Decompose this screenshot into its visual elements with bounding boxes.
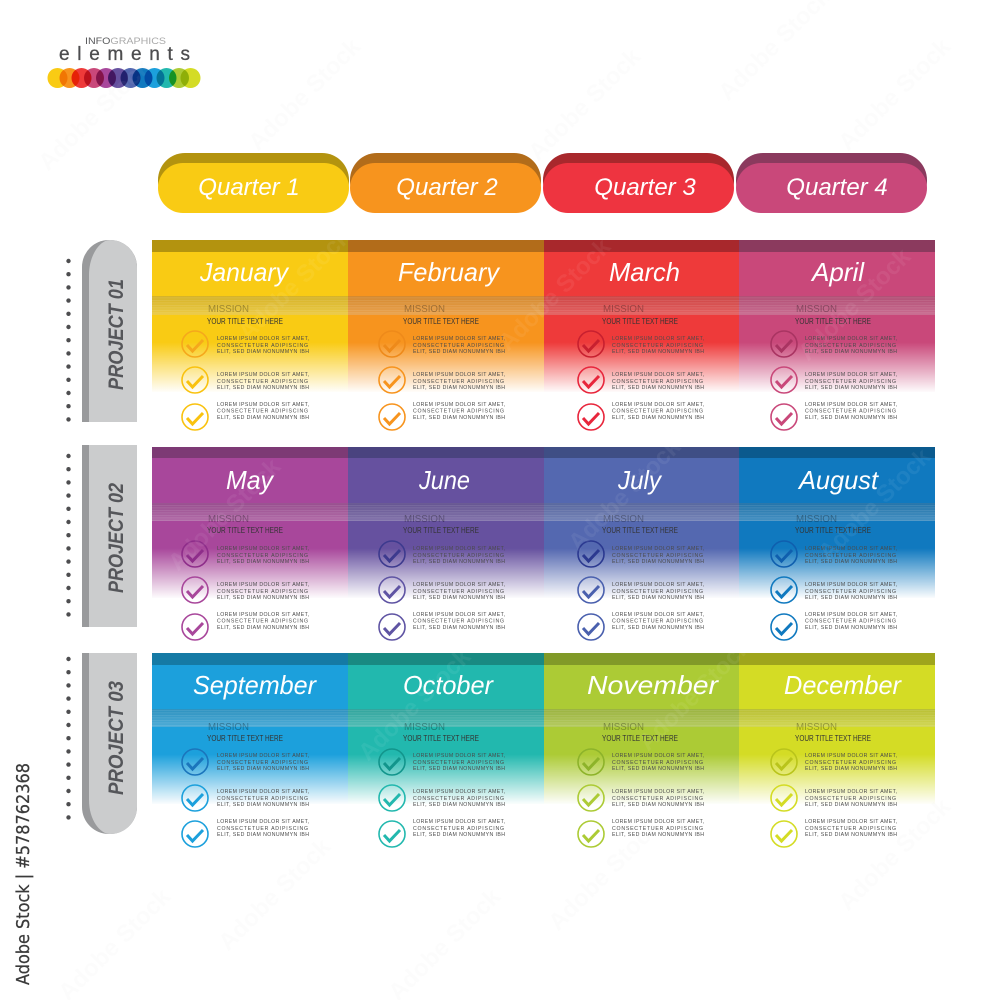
checklist: November <box>578 749 704 847</box>
checklist: December: LOREM IPSUM DOLOR SIT AMET, <box>805 753 897 759</box>
checklist: August: LOREM IPSUM DOLOR SIT AMET, <box>805 582 897 588</box>
mission and title labels: YOUR TITLE TEXT HERE <box>403 317 479 326</box>
checklist: September: LOREM IPSUM DOLOR SIT AMET, <box>217 819 309 825</box>
checklist: June <box>379 541 505 640</box>
checklist: April: ELIT, SED DIAM NONUMMYN IBH <box>805 415 897 421</box>
checklist: January: ELIT, SED DIAM NONUMMYN IBH <box>217 415 309 421</box>
checklist: August: ELIT, SED DIAM NONUMMYN IBH <box>805 625 897 631</box>
checklist: April: ELIT, SED DIAM NONUMMYN IBH <box>805 349 897 355</box>
watermarks on background: Adobe Stock <box>543 813 667 936</box>
checklist: May: CONSECTETUER ADIPISCING <box>217 589 308 595</box>
checklist: February: LOREM IPSUM DOLOR SIT AMET, <box>413 336 505 342</box>
checklist: November: ELIT, SED DIAM NONUMMYN IBH <box>612 766 704 772</box>
mission and title labels: MISSION <box>603 304 644 315</box>
watermarks on background: Adobe Stock <box>833 33 957 156</box>
checklist: February: CONSECTETUER ADIPISCING <box>413 343 504 349</box>
mission and title labels: YOUR TITLE TEXT HERE <box>795 317 871 326</box>
checklist: July: LOREM IPSUM DOLOR SIT AMET, <box>612 546 704 552</box>
checklist: February: LOREM IPSUM DOLOR SIT AMET, <box>413 372 505 378</box>
checklist: November: ELIT, SED DIAM NONUMMYN IBH <box>612 802 704 808</box>
mission and title labels: MISSION <box>404 514 445 525</box>
month labels: December <box>784 670 902 700</box>
checklist: June: LOREM IPSUM DOLOR SIT AMET, <box>413 546 505 552</box>
project 03 tab: PROJECT 03 <box>105 681 128 795</box>
checklist: March <box>578 331 704 430</box>
watermarks on background: Adobe Stock <box>833 793 957 916</box>
logo: infographics elements <box>48 36 200 88</box>
checklist: November: LOREM IPSUM DOLOR SIT AMET, <box>612 789 704 795</box>
checklist: February: CONSECTETUER ADIPISCING <box>413 408 504 414</box>
checklist: October: CONSECTETUER ADIPISCING <box>413 760 504 766</box>
logo overlapping circles <box>48 68 200 88</box>
checklist: July: LOREM IPSUM DOLOR SIT AMET, <box>612 582 704 588</box>
mission and title labels: YOUR TITLE TEXT HERE <box>602 734 678 743</box>
mission and title labels: YOUR TITLE TEXT HERE <box>602 526 678 535</box>
checklist: October: LOREM IPSUM DOLOR SIT AMET, <box>413 753 505 759</box>
checklist: July <box>578 541 704 640</box>
watermarks on panels: Adobe Stock <box>353 643 477 766</box>
watermarks on background: Adobe Stock <box>243 33 367 156</box>
row 1 colour panel <box>152 240 935 393</box>
month labels: January <box>199 257 290 287</box>
logo heading large: elements <box>59 44 190 65</box>
checklist: October: LOREM IPSUM DOLOR SIT AMET, <box>413 819 505 825</box>
checklist: September <box>182 749 309 847</box>
watermarks on panels: Adobe Stock <box>563 433 687 556</box>
checklist: January: CONSECTETUER ADIPISCING <box>217 379 308 385</box>
checklist: October: CONSECTETUER ADIPISCING <box>413 796 504 802</box>
mission and title labels: YOUR TITLE TEXT HERE <box>795 526 871 535</box>
mission and title labels: MISSION <box>208 304 249 315</box>
quarter 2 pill <box>350 153 541 213</box>
checklist: June: ELIT, SED DIAM NONUMMYN IBH <box>413 595 505 601</box>
mission and title labels: YOUR TITLE TEXT HERE <box>207 526 283 535</box>
checklist: October: ELIT, SED DIAM NONUMMYN IBH <box>413 766 505 772</box>
month labels: November <box>587 670 719 700</box>
mission and title labels: MISSION <box>404 722 445 733</box>
watermarks on background: Adobe Stock <box>33 53 157 176</box>
checklist: March: CONSECTETUER ADIPISCING <box>612 408 703 414</box>
checklist: August: LOREM IPSUM DOLOR SIT AMET, <box>805 546 897 552</box>
checklist: December: LOREM IPSUM DOLOR SIT AMET, <box>805 789 897 795</box>
month labels: May <box>226 465 275 495</box>
row 2 colour panel <box>152 447 935 599</box>
checklist: July: ELIT, SED DIAM NONUMMYN IBH <box>612 595 704 601</box>
checklist: September: LOREM IPSUM DOLOR SIT AMET, <box>217 789 309 795</box>
mission and title labels: MISSION <box>208 514 249 525</box>
month labels: April <box>810 257 865 287</box>
mission and title labels: YOUR TITLE TEXT HERE <box>403 734 479 743</box>
checklist: February: ELIT, SED DIAM NONUMMYN IBH <box>413 415 505 421</box>
mission and title labels: YOUR TITLE TEXT HERE <box>207 317 283 326</box>
checklist: January: LOREM IPSUM DOLOR SIT AMET, <box>217 402 309 408</box>
month labels: July <box>617 465 663 495</box>
checklist: August: ELIT, SED DIAM NONUMMYN IBH <box>805 595 897 601</box>
checklist: September: ELIT, SED DIAM NONUMMYN IBH <box>217 802 309 808</box>
checklist: January: ELIT, SED DIAM NONUMMYN IBH <box>217 349 309 355</box>
month labels: August <box>797 465 880 495</box>
checklist: October: LOREM IPSUM DOLOR SIT AMET, <box>413 789 505 795</box>
quarter 4 pill: Quarter 4 <box>786 174 888 201</box>
checklist: October <box>379 749 505 847</box>
checklist: October: ELIT, SED DIAM NONUMMYN IBH <box>413 802 505 808</box>
month labels <box>193 257 902 700</box>
mission and title labels: MISSION <box>603 722 644 733</box>
checklist: April: CONSECTETUER ADIPISCING <box>805 408 896 414</box>
checklist: September: ELIT, SED DIAM NONUMMYN IBH <box>217 766 309 772</box>
project 01 tab: PROJECT 01 <box>105 279 128 390</box>
quarter 4 pill <box>736 153 927 213</box>
checklist: May: ELIT, SED DIAM NONUMMYN IBH <box>217 625 309 631</box>
checklist: February: ELIT, SED DIAM NONUMMYN IBH <box>413 349 505 355</box>
checklist: March: ELIT, SED DIAM NONUMMYN IBH <box>612 349 704 355</box>
checklist: November: CONSECTETUER ADIPISCING <box>612 826 703 832</box>
checklist: July: ELIT, SED DIAM NONUMMYN IBH <box>612 625 704 631</box>
checklist: September: CONSECTETUER ADIPISCING <box>217 796 308 802</box>
quarter 1 pill <box>158 153 349 213</box>
checklist: December: ELIT, SED DIAM NONUMMYN IBH <box>805 802 897 808</box>
checklist: January <box>182 331 309 430</box>
checklist: May: CONSECTETUER ADIPISCING <box>217 618 308 624</box>
dotted line project 01 <box>66 259 71 422</box>
checklist: November: LOREM IPSUM DOLOR SIT AMET, <box>612 819 704 825</box>
checklist: July: LOREM IPSUM DOLOR SIT AMET, <box>612 612 704 618</box>
checklist: June: CONSECTETUER ADIPISCING <box>413 589 504 595</box>
watermarks on background: Adobe Stock <box>523 43 647 166</box>
mission and title labels: MISSION <box>404 304 445 315</box>
month labels: March <box>609 257 680 287</box>
checklist: May: LOREM IPSUM DOLOR SIT AMET, <box>217 612 309 618</box>
quarter 3 pill <box>543 153 734 213</box>
checklist: August: CONSECTETUER ADIPISCING <box>805 589 896 595</box>
project 02 tab: PROJECT 02 <box>105 483 128 593</box>
checklist: December: CONSECTETUER ADIPISCING <box>805 826 896 832</box>
checklist: November: LOREM IPSUM DOLOR SIT AMET, <box>612 753 704 759</box>
checklist: August: CONSECTETUER ADIPISCING <box>805 553 896 559</box>
project 02 tab <box>82 445 137 627</box>
checklist: April: LOREM IPSUM DOLOR SIT AMET, <box>805 336 897 342</box>
checklist: September: CONSECTETUER ADIPISCING <box>217 826 308 832</box>
checklist: May: ELIT, SED DIAM NONUMMYN IBH <box>217 559 309 565</box>
stock id side label: Adobe Stock | #578762368 <box>13 763 34 985</box>
checklist: February: CONSECTETUER ADIPISCING <box>413 379 504 385</box>
watermarks on panels: Adobe Stock <box>233 223 357 346</box>
quarter 1 pill: Quarter 1 <box>198 174 300 201</box>
quarter 2 pill: Quarter 2 <box>396 174 498 201</box>
checklist: December <box>771 749 897 847</box>
watermarks on panels: Adobe Stock <box>793 243 917 366</box>
checklist: March: LOREM IPSUM DOLOR SIT AMET, <box>612 372 704 378</box>
checklist: April: CONSECTETUER ADIPISCING <box>805 379 896 385</box>
mission and title labels: MISSION <box>796 514 837 525</box>
checklist: March: LOREM IPSUM DOLOR SIT AMET, <box>612 336 704 342</box>
checklist: April <box>771 331 897 430</box>
checklist: March: CONSECTETUER ADIPISCING <box>612 379 703 385</box>
month labels: September <box>193 670 317 700</box>
watermarks on panels: Adobe Stock <box>813 443 937 566</box>
checklist: April: ELIT, SED DIAM NONUMMYN IBH <box>805 385 897 391</box>
checklist: July: CONSECTETUER ADIPISCING <box>612 553 703 559</box>
month labels: June <box>418 465 470 495</box>
watermarks on panels: Adobe Stock <box>493 233 617 356</box>
checklist: March: ELIT, SED DIAM NONUMMYN IBH <box>612 415 704 421</box>
checklist: October: CONSECTETUER ADIPISCING <box>413 826 504 832</box>
checklist: December: CONSECTETUER ADIPISCING <box>805 760 896 766</box>
checklist: March: CONSECTETUER ADIPISCING <box>612 343 703 349</box>
checklist: August: ELIT, SED DIAM NONUMMYN IBH <box>805 559 897 565</box>
mission and title labels: MISSION <box>796 722 837 733</box>
mission and title labels: YOUR TITLE TEXT HERE <box>795 734 871 743</box>
mission and title labels: MISSION <box>796 304 837 315</box>
month labels: February <box>398 257 501 287</box>
watermarks on panels: Adobe Stock <box>633 633 757 756</box>
logo heading small: INFO GRAPHICS <box>85 36 166 47</box>
checklist: January: CONSECTETUER ADIPISCING <box>217 343 308 349</box>
checklist: June: CONSECTETUER ADIPISCING <box>413 618 504 624</box>
watermarks on background: Adobe Stock <box>213 833 337 956</box>
checklist: February: ELIT, SED DIAM NONUMMYN IBH <box>413 385 505 391</box>
mission and title labels: YOUR TITLE TEXT HERE <box>207 734 283 743</box>
month labels: October <box>403 670 494 700</box>
watermarks on panels: Adobe Stock <box>163 453 287 576</box>
checklist: April: LOREM IPSUM DOLOR SIT AMET, <box>805 402 897 408</box>
checklist: June: CONSECTETUER ADIPISCING <box>413 553 504 559</box>
checklist: January: CONSECTETUER ADIPISCING <box>217 408 308 414</box>
checklist: November: CONSECTETUER ADIPISCING <box>612 760 703 766</box>
checklist: December: ELIT, SED DIAM NONUMMYN IBH <box>805 832 897 838</box>
mission and title labels <box>207 304 871 743</box>
row 3 colour panel <box>152 653 935 805</box>
checklist: December: CONSECTETUER ADIPISCING <box>805 796 896 802</box>
checklist: August: LOREM IPSUM DOLOR SIT AMET, <box>805 612 897 618</box>
checklist: May <box>182 541 309 640</box>
project 03 tab <box>82 653 137 834</box>
checklist: March: LOREM IPSUM DOLOR SIT AMET, <box>612 402 704 408</box>
dotted line project 02 <box>66 454 71 617</box>
checklist: June: ELIT, SED DIAM NONUMMYN IBH <box>413 559 505 565</box>
checklist: January: LOREM IPSUM DOLOR SIT AMET, <box>217 336 309 342</box>
quarter headers <box>158 153 927 213</box>
checklist: April: CONSECTETUER ADIPISCING <box>805 343 896 349</box>
dotted line project 03 <box>66 657 71 820</box>
checklist: September: CONSECTETUER ADIPISCING <box>217 760 308 766</box>
checklist: March: ELIT, SED DIAM NONUMMYN IBH <box>612 385 704 391</box>
checklist: June: LOREM IPSUM DOLOR SIT AMET, <box>413 612 505 618</box>
checklist: May: ELIT, SED DIAM NONUMMYN IBH <box>217 595 309 601</box>
mission and title labels: YOUR TITLE TEXT HERE <box>602 317 678 326</box>
checklist: February: LOREM IPSUM DOLOR SIT AMET, <box>413 402 505 408</box>
checklist: November: ELIT, SED DIAM NONUMMYN IBH <box>612 832 704 838</box>
checklist: July: CONSECTETUER ADIPISCING <box>612 589 703 595</box>
checklist: January: ELIT, SED DIAM NONUMMYN IBH <box>217 385 309 391</box>
checklist: August <box>771 541 897 640</box>
checklist: July: CONSECTETUER ADIPISCING <box>612 618 703 624</box>
mission and title labels: YOUR TITLE TEXT HERE <box>403 526 479 535</box>
checklist: September: LOREM IPSUM DOLOR SIT AMET, <box>217 753 309 759</box>
checklist: October: ELIT, SED DIAM NONUMMYN IBH <box>413 832 505 838</box>
watermarks on panels <box>163 223 937 766</box>
mission and title labels: MISSION <box>603 514 644 525</box>
checklist: April: LOREM IPSUM DOLOR SIT AMET, <box>805 372 897 378</box>
checklist: January: LOREM IPSUM DOLOR SIT AMET, <box>217 372 309 378</box>
checklist: December: LOREM IPSUM DOLOR SIT AMET, <box>805 819 897 825</box>
checklist: September: ELIT, SED DIAM NONUMMYN IBH <box>217 832 309 838</box>
checklist: June: ELIT, SED DIAM NONUMMYN IBH <box>413 625 505 631</box>
checklist: December: ELIT, SED DIAM NONUMMYN IBH <box>805 766 897 772</box>
checklist: August: CONSECTETUER ADIPISCING <box>805 618 896 624</box>
checklist: May: LOREM IPSUM DOLOR SIT AMET, <box>217 546 309 552</box>
checklist: February <box>379 331 505 430</box>
project 01 tab <box>82 240 137 422</box>
checklist: June: LOREM IPSUM DOLOR SIT AMET, <box>413 582 505 588</box>
mission and title labels: MISSION <box>208 722 249 733</box>
checklist: July: ELIT, SED DIAM NONUMMYN IBH <box>612 559 704 565</box>
checklist: May: CONSECTETUER ADIPISCING <box>217 553 308 559</box>
quarter 3 pill: Quarter 3 <box>594 174 696 201</box>
checklist: November: CONSECTETUER ADIPISCING <box>612 796 703 802</box>
checklist: May: LOREM IPSUM DOLOR SIT AMET, <box>217 582 309 588</box>
